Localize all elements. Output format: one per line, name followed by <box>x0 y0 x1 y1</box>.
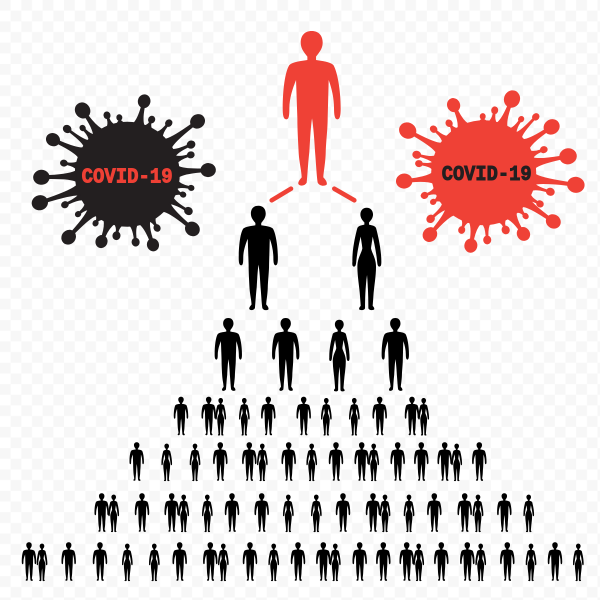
virus: red with black label <box>395 88 586 254</box>
figure: infected red man at apex <box>283 31 341 186</box>
red virus body and spikes <box>395 88 586 254</box>
black virus body and spikes <box>30 93 216 253</box>
arrow: red dash to left <box>272 189 291 200</box>
row 7: small figures <box>22 542 584 581</box>
row 5: small figures <box>129 442 487 481</box>
label: COVID-19 in black: COVID-19 <box>442 164 532 187</box>
row 6: small figures <box>94 493 534 532</box>
row 3: four black figures <box>215 318 409 391</box>
virus: black with red label <box>30 93 216 253</box>
row 4: small figures <box>174 397 429 436</box>
row 2: two black figures <box>239 206 381 310</box>
arrow: red dash to right <box>334 189 354 200</box>
label: COVID-19 in red: COVID-19 <box>82 167 173 190</box>
